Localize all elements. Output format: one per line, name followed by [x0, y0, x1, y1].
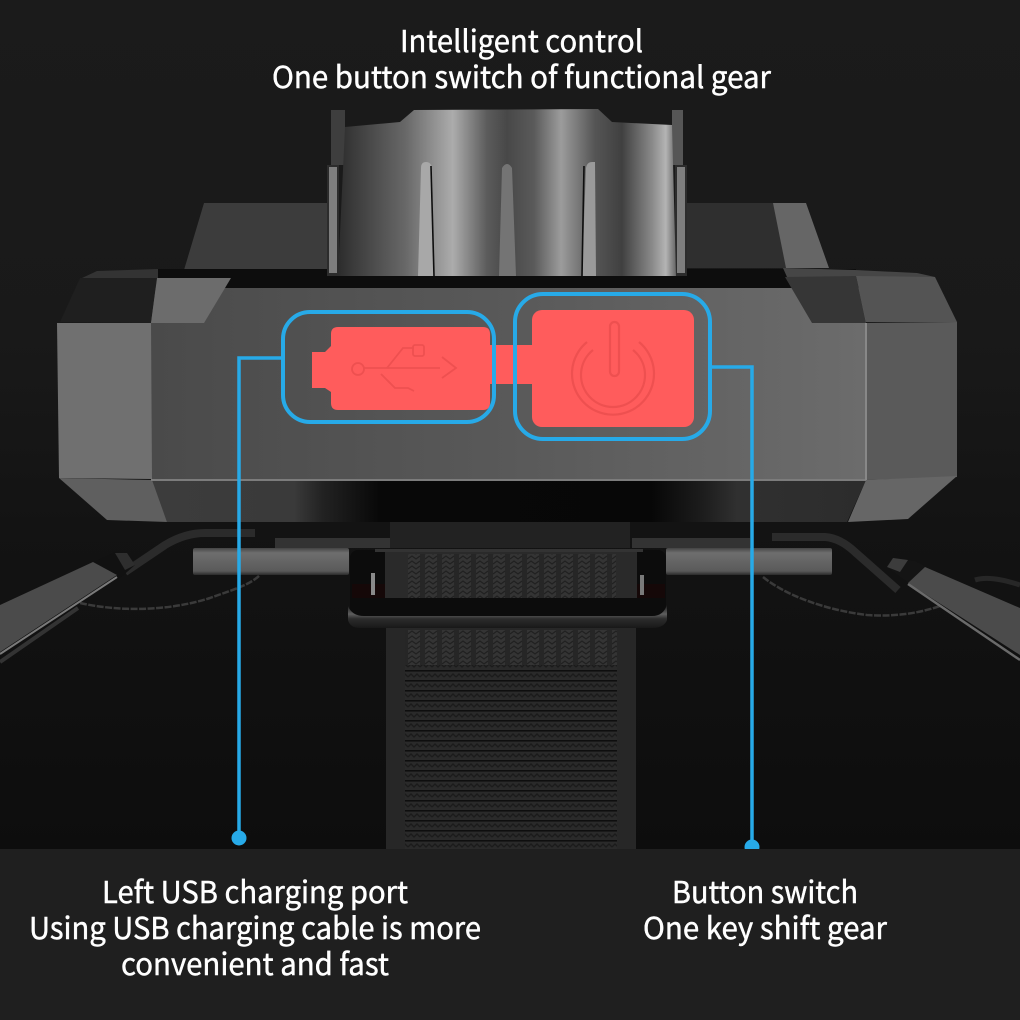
- headlamp back wing right: [684, 203, 829, 268]
- USB highlight frame: [283, 312, 494, 422]
- red rubber connector: [488, 345, 536, 384]
- caption: button switch: One key shift gear: [643, 904, 887, 948]
- caption: USB charging port: [29, 868, 481, 984]
- caption: USB charging port: Using USB charging cable is more: [29, 904, 481, 948]
- right strap: [763, 537, 1020, 660]
- rotary knob: [327, 109, 687, 278]
- headlamp body: [57, 268, 957, 522]
- leader line: USB port: [232, 358, 283, 846]
- right bracket plate: [666, 548, 832, 575]
- heading: intelligent control: One button switch of functional gear: [272, 53, 771, 97]
- left upper bracket: [275, 538, 390, 548]
- right upper bracket: [632, 538, 750, 548]
- button highlight frame: [515, 294, 710, 439]
- heading: intelligent control: [272, 17, 771, 97]
- caption: button switch: Button switch: [672, 868, 858, 912]
- left strap: [0, 533, 260, 662]
- dark shadow band below body: [230, 522, 780, 538]
- USB symbol: [352, 345, 456, 391]
- left bracket plate: [193, 548, 349, 575]
- leader line: button switch: [711, 367, 760, 854]
- red power button: [532, 310, 694, 427]
- buckle: [348, 522, 667, 628]
- caption: USB charging port: Left USB charging port: [102, 868, 408, 912]
- caption: button switch: [643, 868, 887, 948]
- bottom caption band: [0, 849, 1020, 1020]
- power symbol: [572, 322, 654, 415]
- headlamp back wing left: [184, 203, 330, 270]
- heading: intelligent control: Intelligent control: [400, 17, 643, 61]
- fabric strap: [386, 628, 636, 850]
- caption: USB charging port: convenient and fast: [121, 940, 389, 984]
- red USB port cover: [312, 327, 490, 410]
